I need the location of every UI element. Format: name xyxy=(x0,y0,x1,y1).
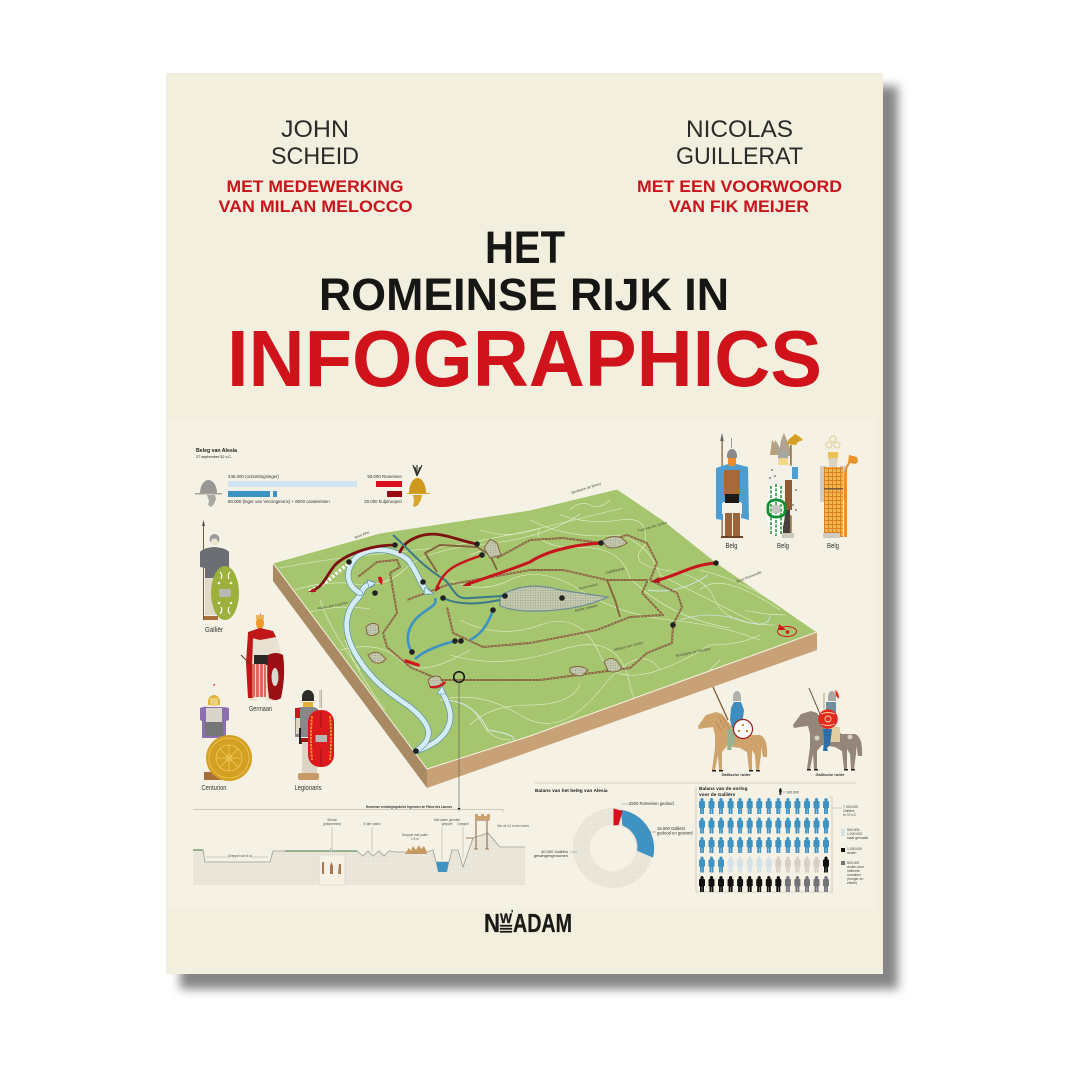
bright red attack arrows xyxy=(437,543,716,588)
bar chart: Roman forces: 50.000 Romeinen xyxy=(367,474,403,479)
pictogram legend: ziekte) xyxy=(847,881,857,885)
foreword credit xyxy=(637,177,842,216)
map place labels: Bertilaine de Bussy xyxy=(571,482,602,495)
numbered map markers xyxy=(346,540,719,754)
publisher logo: ADAM xyxy=(513,908,572,938)
author: Nicolas Guillerat: GUILLERAT xyxy=(676,143,803,170)
author: John Scheid: SCHEID xyxy=(271,143,359,170)
donut labels: gedood en gewond xyxy=(657,830,693,836)
oppidum of Alesia xyxy=(500,586,608,611)
panel: balance of the siege of Alesia xyxy=(534,788,693,880)
pictogram legend: doden xyxy=(847,851,857,855)
heading: balance of the war: Balans van de oorlog xyxy=(699,786,748,792)
cross-section labels: Greppel van 6 m xyxy=(228,854,252,858)
3D terrain map of Alesia xyxy=(273,482,817,788)
pictogram legend: 500.000 xyxy=(847,861,859,865)
panel: siege balance of forces xyxy=(195,448,430,507)
figure: Belg with blue cloak: Belg xyxy=(726,541,738,550)
dark red attack arrows xyxy=(312,534,477,591)
author: John Scheid xyxy=(271,116,359,170)
map place labels: Alesia: plateau xyxy=(574,603,598,613)
Roman units in red xyxy=(378,577,446,688)
cross-section labels: Greppel met palen xyxy=(402,833,428,837)
map place labels: Galliërkamp xyxy=(605,566,625,575)
cross-section labels: greppel xyxy=(442,822,453,826)
pictogram legend: 7.000.000 xyxy=(843,805,858,809)
pictogram legend xyxy=(833,805,868,885)
figure: Gallic rider on tan horse xyxy=(698,687,767,777)
cross-section labels: Greppel xyxy=(457,822,469,826)
publisher logo xyxy=(484,908,572,938)
Roman camps xyxy=(366,537,627,688)
infographic background panel xyxy=(168,420,876,908)
retreat dots xyxy=(308,564,348,592)
map place labels: Mont Pennevelle xyxy=(736,570,762,584)
row 3 xyxy=(699,837,829,853)
title: HET xyxy=(485,222,565,273)
publisher logo: W xyxy=(500,910,513,926)
ground surface line xyxy=(193,833,525,867)
figure: Germaan warrior xyxy=(241,613,284,713)
map place labels xyxy=(317,482,762,658)
branches obstacle xyxy=(405,845,427,854)
book shadow xyxy=(180,86,898,989)
pictogram legend scale: = 100.000 xyxy=(783,790,799,794)
cross-section labels: Stimuli xyxy=(327,818,337,822)
contour lines and streams xyxy=(280,500,785,755)
pictogram chart xyxy=(699,798,829,892)
cross-section heading: Romeinse verdedigingslinies tegenover de Plaine des Laumes xyxy=(366,805,452,809)
contributor credit: MET MEDEWERKING xyxy=(226,177,404,196)
figure: Belg with ermine cloak and green shield: Belg xyxy=(777,541,789,550)
figure: Germaan warrior: Germaan xyxy=(249,704,272,713)
title xyxy=(227,222,822,403)
blue troop arrows xyxy=(408,598,493,659)
contributor credit: VAN MILAN MELOCCO xyxy=(218,197,412,216)
figure: Belg with plaid tunic and carnyx: Belg xyxy=(827,541,839,550)
figure: Gallic rider on grey horse xyxy=(793,688,862,777)
author: Nicolas Guillerat xyxy=(676,116,803,170)
book cover xyxy=(166,73,883,974)
figure: Gallier warrior: Galliër xyxy=(205,625,223,634)
publisher logo: N xyxy=(484,908,500,938)
donut chart xyxy=(582,808,654,880)
map place labels: Mont Rhe xyxy=(354,530,370,540)
pointer line from map to cross-section xyxy=(454,672,464,810)
donut labels: 2500 Romeinen gedood xyxy=(629,801,674,806)
red arrowheads xyxy=(308,577,660,592)
title: INFOGRAPHICS xyxy=(227,314,822,403)
pictogram legend: doden door xyxy=(847,865,865,869)
cross-section labels: Met water gevulde xyxy=(434,818,460,822)
pictogram legend: in 70 v.C. xyxy=(843,813,857,817)
cross-section labels: 6 rijen palen xyxy=(363,822,381,826)
author: Nicolas Guillerat: NICOLAS xyxy=(686,116,793,143)
heading: siege of Alesia: Beleg van Alesia xyxy=(196,448,237,454)
pictogram legend: slaaf gemaakt xyxy=(847,836,868,840)
map place labels: Fuet van Bo Seliès xyxy=(637,521,667,533)
figure: Gallier warrior xyxy=(200,520,239,634)
pictogram legend: oorzaken xyxy=(847,873,861,877)
figure: Centurion xyxy=(200,684,252,792)
water ditch xyxy=(436,862,449,872)
icon: grey Gallic helmet xyxy=(195,480,222,507)
heading: siege of Alesia xyxy=(196,448,237,459)
pictogram legend: indirecte xyxy=(847,869,860,873)
row 2 xyxy=(699,817,829,834)
map place labels: Mont Auxois xyxy=(578,582,598,591)
donut labels: gevangengenomen xyxy=(534,853,568,858)
heading: balance of the war xyxy=(699,786,748,798)
pictogram legend: Galliërs xyxy=(843,809,855,813)
pictogram legend: 1.000.000 xyxy=(847,832,862,836)
green ground strips xyxy=(193,850,357,851)
terrain surface xyxy=(273,489,817,769)
foreword credit: MET EEN VOORWOORD xyxy=(637,177,842,196)
teal troop arrows xyxy=(393,535,503,604)
arrowheads on river arrows xyxy=(367,580,446,694)
row 4 xyxy=(699,856,829,872)
bar chart: Gallic forces: 80.000 (leger van Vercingetorix) + 8000 cavaleristen xyxy=(228,499,330,504)
ground profile xyxy=(193,833,525,885)
figure: Centurion: Centurion xyxy=(202,783,226,792)
bar chart: Roman forces xyxy=(364,474,403,504)
figure: Legionaris xyxy=(294,690,334,792)
divider above balance charts xyxy=(535,782,856,784)
donut labels: 15.000 Galliërs xyxy=(657,826,685,831)
contributor credit xyxy=(218,177,412,216)
pit with stakes xyxy=(319,849,345,885)
figure: Belg with plaid tunic and carnyx xyxy=(820,436,858,550)
figure: Belg with blue cloak xyxy=(716,433,749,550)
cross-section labels: Om de 24 m een toren xyxy=(497,824,529,828)
publisher logo: ’ xyxy=(511,909,513,918)
Roman fortification ticks xyxy=(358,535,682,680)
figure: Gallic rider on tan horse: Gallische ruiter xyxy=(721,772,751,777)
map place labels: Abbaye van Cestor xyxy=(613,641,645,652)
heading: balance of the war: voor de Galliërs xyxy=(699,792,736,798)
Roman fortification lines xyxy=(358,535,682,680)
compass rose xyxy=(778,624,796,636)
figure: Belg with ermine cloak and green shield xyxy=(767,433,803,550)
foreword credit: VAN FIK MEIJER xyxy=(669,197,809,216)
figure: Gallic rider on grey horse: Gallische ruiter xyxy=(815,772,845,777)
pictogram legend: (honger en xyxy=(847,877,864,881)
icon: gold Roman helmet xyxy=(407,465,430,507)
cross-section labels xyxy=(228,818,529,858)
donut labels: 40.000 Galliërs xyxy=(541,849,568,854)
pictogram legend: 500.000- xyxy=(847,828,860,832)
map place labels: Plaine des Laumes xyxy=(317,601,348,611)
terrain block sides xyxy=(273,563,817,788)
panel: balance of the war for the Gauls xyxy=(696,786,868,892)
river arrows (light blue) xyxy=(347,550,450,751)
bar chart: Gallic forces xyxy=(228,474,357,504)
title: ROMEINSE RIJK IN xyxy=(319,269,729,320)
cross-section labels: 1,5 m xyxy=(411,837,419,841)
bar chart: Gallic forces: 246.000 (ontzettingsleger) xyxy=(228,474,280,479)
cross-section pointers xyxy=(206,827,463,860)
heading: balance of the siege: Balans van het beleg van Alesia xyxy=(535,788,608,794)
cross-section of Roman defence lines xyxy=(193,805,529,885)
row 1 xyxy=(699,798,829,814)
pictogram legend: 1.000.000 xyxy=(847,847,862,851)
heading: siege of Alesia: 27 september 52 v.C. xyxy=(196,455,232,459)
figure: Legionaris: Legionaris xyxy=(294,783,322,792)
bar chart: Roman forces: 30.000 hulptroepen xyxy=(364,499,403,504)
pictogram legend scale xyxy=(779,788,799,795)
watchtower xyxy=(466,814,490,849)
donut labels xyxy=(534,801,693,858)
map place labels: Montagne de Flavigny xyxy=(675,647,711,658)
chart axes xyxy=(696,787,833,892)
cross-section labels: (prikpennen) xyxy=(323,822,341,826)
row 5 xyxy=(699,876,829,892)
author: John Scheid: JOHN xyxy=(281,116,349,143)
